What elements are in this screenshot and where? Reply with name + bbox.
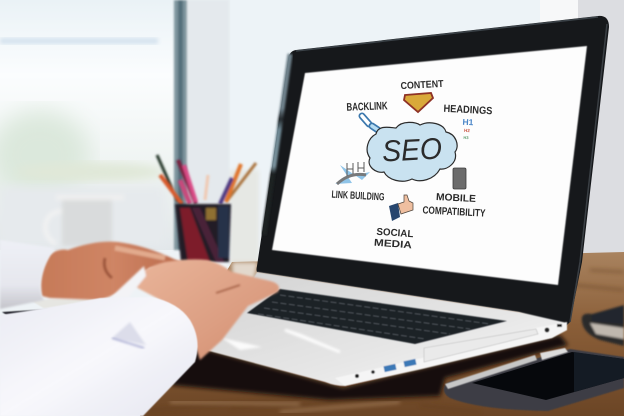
right hand: [110, 259, 279, 360]
ports: [384, 364, 396, 372]
mobile compatibility label and phone icon: [422, 168, 486, 220]
social media label and thumbs-up icon: [374, 195, 414, 251]
coffee mug: [45, 195, 124, 246]
link building label and bridge icon: [331, 162, 385, 203]
SEO cloud: [367, 122, 457, 181]
left shirt cuff: [0, 240, 55, 309]
phone on desk: [444, 348, 624, 411]
shadow under laptop: [170, 335, 568, 400]
keyboard: [247, 289, 507, 344]
SEO cloud: SEO: [381, 132, 443, 169]
wooden desk: [140, 252, 624, 416]
notebook at right edge: [582, 305, 624, 346]
headings label and H1 H2 H3: H1: [462, 117, 474, 127]
headings label and H1 H2 H3: H3: [463, 135, 469, 140]
mobile compatibility label and phone icon: MOBILE: [436, 192, 477, 205]
link building label and bridge icon: LINK BUILDING: [331, 189, 385, 203]
window frame post: [174, 0, 229, 262]
SEO diagram on screen: [331, 79, 493, 251]
headings label and H1 H2 H3: [443, 103, 493, 140]
content heading and badge: [400, 79, 444, 112]
laptop screen: [272, 46, 587, 285]
headings label and H1 H2 H3: H2: [464, 128, 470, 133]
social media label and thumbs-up icon: MEDIA: [374, 238, 412, 251]
laptop edge under left hand: [30, 298, 120, 312]
headings label and H1 H2 H3: HEADINGS: [443, 103, 493, 117]
content heading and badge: CONTENT: [400, 79, 444, 92]
backlink heading and chain icon: [346, 100, 388, 130]
backlink heading and chain icon: BACKLINK: [346, 100, 388, 114]
dark gap under wrist: [2, 309, 70, 319]
mobile compatibility label and phone icon: COMPATIBILITY: [422, 204, 486, 220]
left hand: [41, 242, 186, 300]
pencil holder with pencils: [157, 155, 256, 262]
right shirt sleeve: [0, 297, 198, 416]
laptop lid: [256, 16, 609, 326]
social media label and thumbs-up icon: SOCIAL: [376, 227, 414, 240]
laptop base: [190, 272, 567, 386]
